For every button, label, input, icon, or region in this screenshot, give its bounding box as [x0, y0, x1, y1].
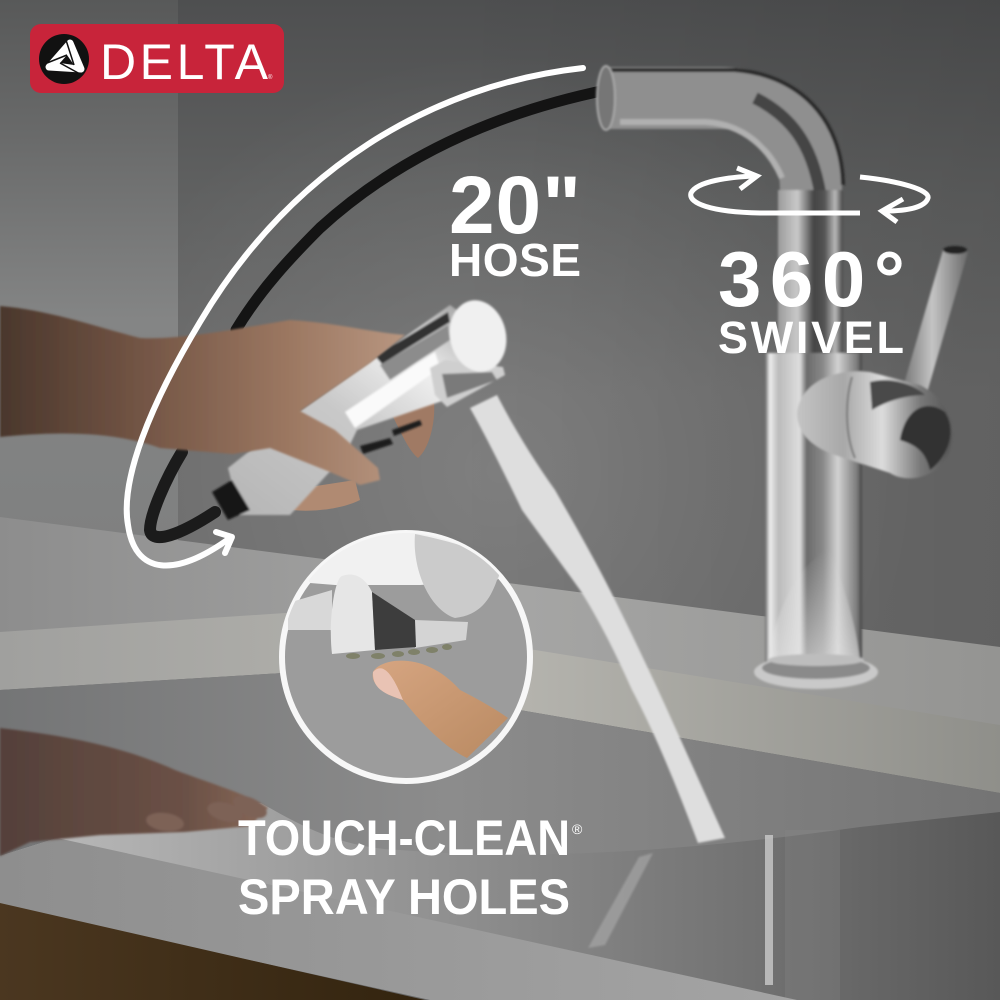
lever [903, 250, 968, 393]
handle body [797, 371, 952, 478]
water stream [470, 395, 725, 843]
vanity counter and sink [0, 517, 1000, 1000]
end cap [443, 295, 513, 377]
spout top edge [610, 70, 843, 185]
handle end cap [900, 406, 950, 470]
label: touch-clean spray holes: TOUCH-CLEAN [238, 810, 570, 866]
hose [150, 90, 606, 537]
chrome highlights [345, 352, 440, 428]
finger [373, 661, 508, 758]
deck behind sink [0, 517, 1000, 730]
sprayer back fingers [290, 400, 434, 511]
swivel arrows [691, 168, 928, 222]
counter front face [0, 838, 797, 1000]
touch-clean nozzles [346, 644, 452, 659]
label: touch-clean spray holes: ® [572, 821, 583, 837]
label: 360 degree swivel: 360° [718, 235, 905, 323]
hand holding sprayer [0, 306, 405, 485]
logo mark [39, 34, 89, 84]
spout inner dark band [755, 98, 822, 205]
column [765, 353, 862, 663]
label: 20 inch hose: HOSE [449, 234, 581, 286]
right chrome [415, 620, 468, 648]
handle collar seam [847, 377, 855, 458]
fingernail [373, 668, 403, 700]
nozzle hump [331, 574, 375, 654]
countertop front rim [0, 803, 1000, 1000]
logo badge: ® [268, 74, 273, 81]
neck [778, 190, 843, 365]
basin [0, 672, 1000, 900]
spout [606, 98, 811, 300]
logo badge [30, 24, 284, 93]
column reflection [768, 550, 860, 660]
label: 360 degree swivel: SWIVEL [718, 312, 904, 363]
reflection strips [588, 853, 653, 948]
sprayer head [212, 295, 513, 520]
sink ledge [0, 612, 1000, 793]
handle dark band [870, 380, 925, 410]
hose reach arc arrow [127, 68, 583, 566]
end cap [415, 534, 499, 618]
wood vanity [0, 903, 425, 1000]
hose collar [212, 480, 250, 520]
top dark streak [375, 312, 450, 364]
nozzle [430, 360, 505, 407]
label: 20 inch hose: 20" [449, 160, 581, 251]
dark grip bars [360, 438, 393, 454]
inset: touch-clean spray holes [280, 525, 530, 781]
label: touch-clean spray holes: SPRAY HOLES [238, 869, 570, 925]
label: 360 degree swivel [718, 235, 905, 363]
hand on counter [0, 728, 270, 856]
left chrome bar [288, 590, 332, 630]
faucet [597, 66, 968, 689]
label: touch-clean spray holes [238, 810, 583, 925]
sprayer body [310, 536, 498, 585]
logo wordmark: DELTA [100, 34, 269, 90]
base ring [754, 654, 878, 689]
background wall [0, 0, 1000, 680]
dark window [372, 592, 416, 650]
spout opening [597, 66, 615, 130]
spout lower highlight [620, 122, 782, 178]
